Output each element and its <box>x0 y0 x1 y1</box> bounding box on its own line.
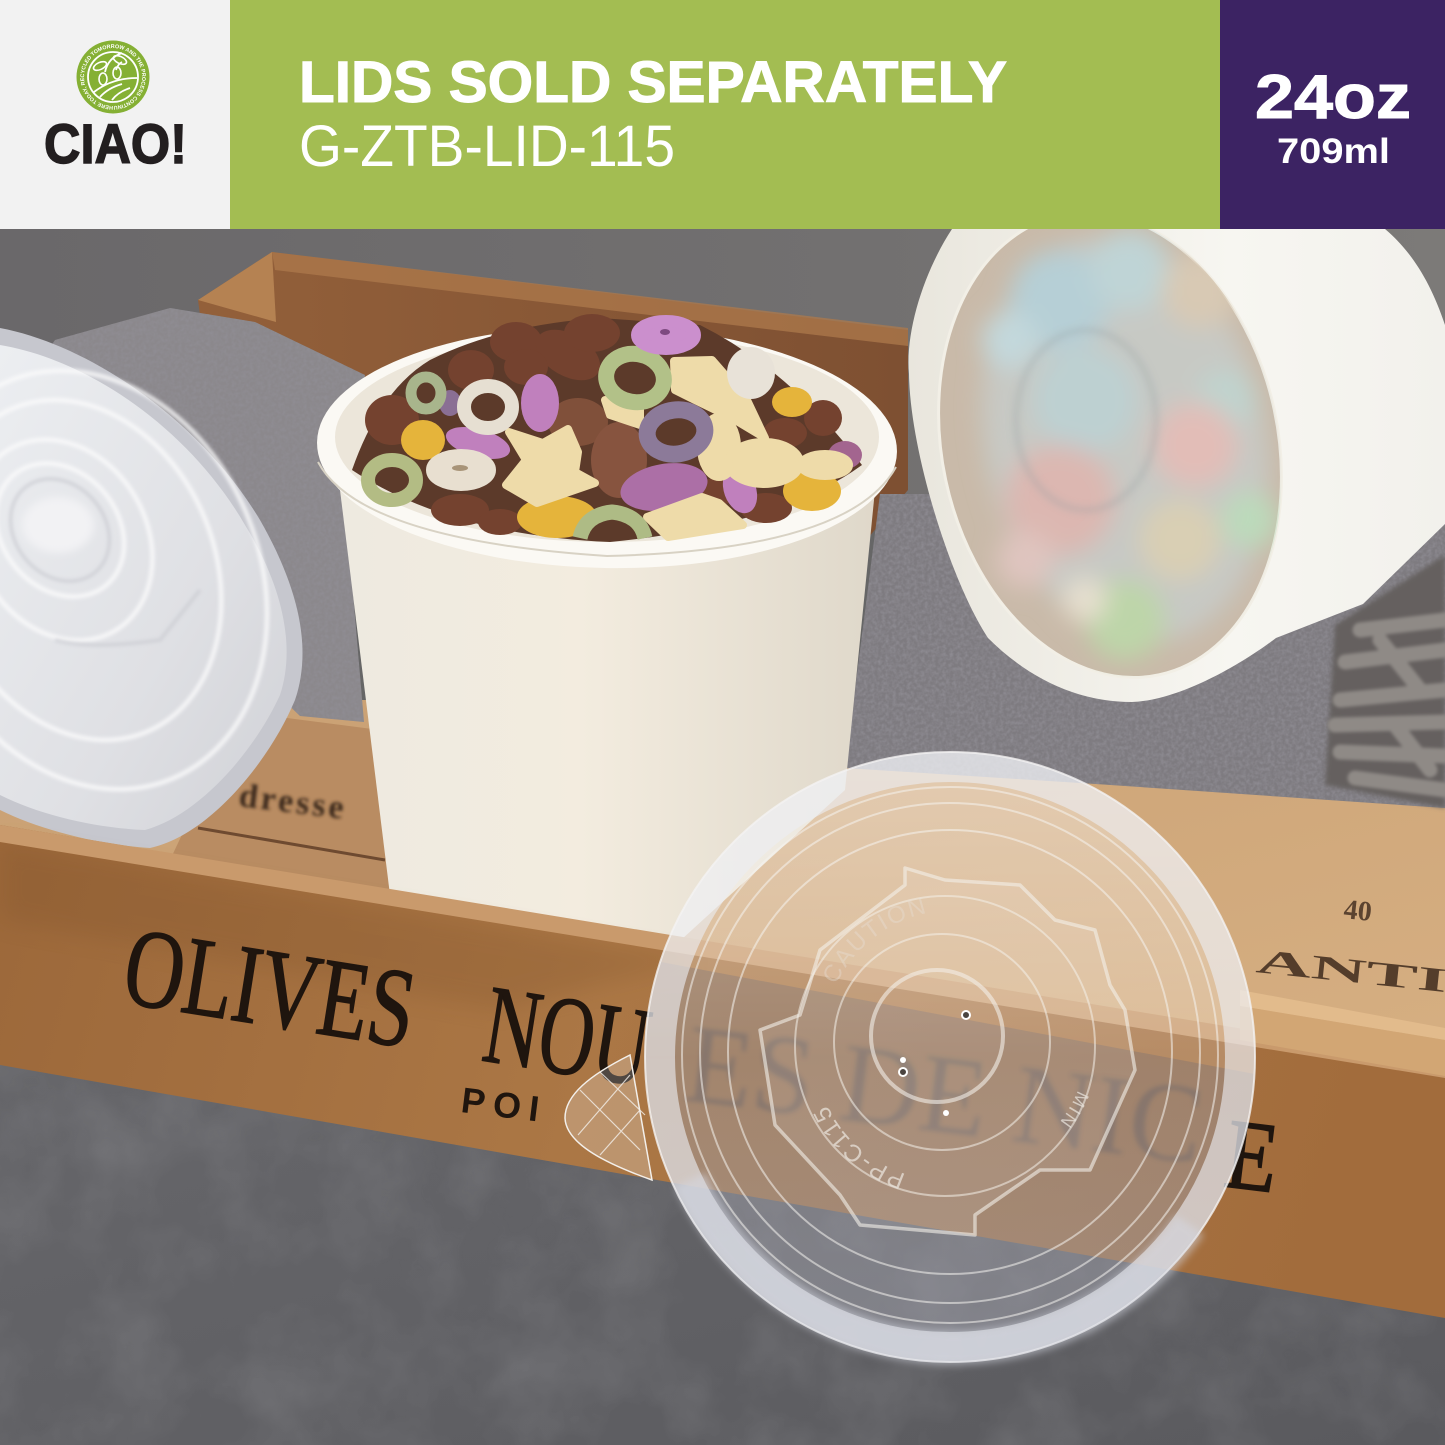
lid pull tab <box>565 1055 652 1180</box>
lid embossed text: MIN <box>1060 1092 1089 1128</box>
lid embossed text: CAUTION <box>824 899 925 982</box>
capacity ml: 709ml <box>1277 132 1390 171</box>
stone floor <box>0 1060 1445 1445</box>
header panel: logo <box>0 0 230 229</box>
tray front panel <box>0 825 1445 1318</box>
cereal: rings <box>368 321 775 538</box>
logo wordmark: CIAO! <box>44 112 187 175</box>
clear plastic lid, foreground <box>564 751 1256 1369</box>
product code: G-ZTB-LID-115 <box>299 114 675 179</box>
header panel: lids notice <box>230 0 1220 229</box>
tray floor, light wood <box>0 700 1445 1080</box>
tray lettering: OLIVES <box>116 904 424 1072</box>
tray back wall <box>198 252 908 620</box>
header panel: capacity <box>1220 0 1445 229</box>
tray floor printed text <box>237 777 1445 1000</box>
cereal: yellow pieces <box>401 387 841 538</box>
lid embossed text: PP-C115 <box>813 1108 904 1189</box>
left lid, lying behind the tray <box>0 317 328 848</box>
tray floor printed text: 40 <box>1342 894 1373 928</box>
heading: LIDS SOLD SEPARATELY <box>299 50 1007 115</box>
photo background: wall <box>0 229 1445 509</box>
tray lettering: NOU <box>476 962 658 1111</box>
tray lettering <box>116 904 1284 1214</box>
capacity oz: 24oz <box>1255 63 1411 132</box>
tray lettering: POI <box>459 1079 549 1130</box>
grey cloth <box>0 300 1445 820</box>
tray lettering: ES DE NIC <box>679 1002 1210 1188</box>
cereal: pink pieces <box>439 374 862 518</box>
lid disc <box>644 751 1256 1369</box>
logo badge <box>76 40 150 114</box>
tray floor printed text: dresse <box>237 777 349 827</box>
paper bowl on its side, top right <box>908 229 1445 702</box>
cereal filling <box>352 314 862 542</box>
tray lettering: E <box>1219 1098 1284 1214</box>
cereal: star pieces <box>506 360 849 537</box>
white paper cup <box>315 314 899 950</box>
lid embossed text <box>813 899 1089 1189</box>
tray floor printed text: ANTI <box>1254 943 1445 1000</box>
cereal: brown pieces <box>365 314 842 535</box>
lid centre raised pattern <box>760 868 1135 1235</box>
